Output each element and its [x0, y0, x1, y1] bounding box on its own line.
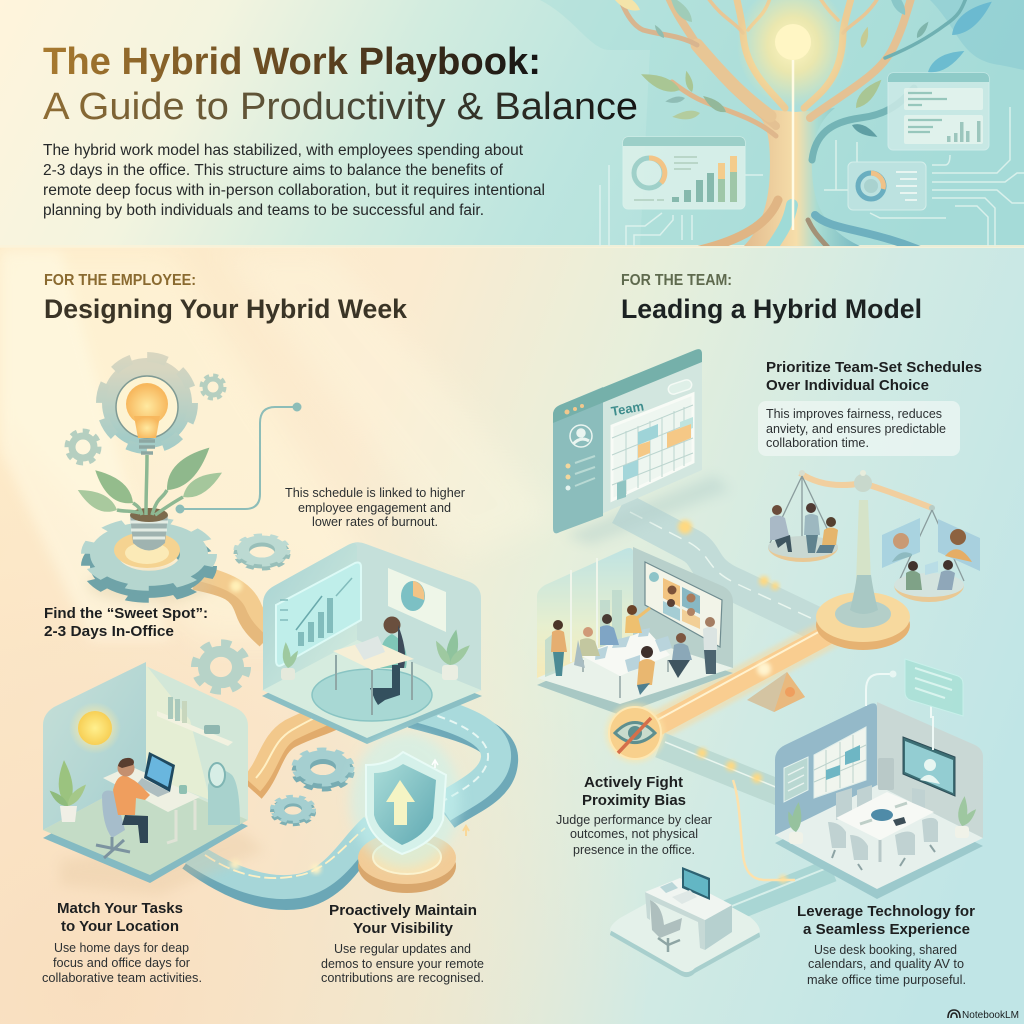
- speaker: [878, 758, 894, 790]
- callout: prioritize team-set schedules: This improves fairness, reduces: [766, 406, 942, 421]
- right pan with people: [882, 510, 980, 602]
- icon: crossed-out eye (proximity bias): [605, 703, 665, 763]
- text: sweet spot heading: 2-3 Days In-Office: [44, 623, 174, 640]
- text: schedule benefit: This schedule is linked to higher: [285, 485, 466, 500]
- icon: triangle marker: [747, 672, 805, 712]
- text: proximity bias: presence in the office.: [573, 842, 695, 857]
- chair: [650, 900, 682, 952]
- text: leverage technology: Leverage Technology for: [797, 903, 975, 920]
- text: schedule benefit: lower rates of burnout.: [312, 514, 438, 529]
- text: sweet spot heading: Find the “Sweet Spot”:: [44, 605, 208, 622]
- conference table: [580, 628, 672, 698]
- seated woman: [816, 517, 838, 553]
- text: maintain visibility: Your Visibility: [353, 920, 454, 937]
- illustration: single desk platform: [610, 867, 760, 977]
- icon: floating tech panel and connectors: [866, 659, 963, 750]
- icon: lightbulb plant on gear: [74, 357, 226, 603]
- text: schedule benefit: [285, 485, 466, 529]
- illustration: office focus room: [262, 542, 482, 744]
- icon: shield with arrow on gold disc: [350, 732, 469, 893]
- illustration: tree with dashboards: [600, 0, 1024, 250]
- profile icon: [570, 425, 592, 447]
- title: [43, 41, 638, 128]
- dashboard: top right list: [888, 73, 989, 150]
- text: match tasks: Use home days for deap: [54, 940, 189, 955]
- text: match tasks: to Your Location: [61, 918, 179, 935]
- large base gear: [88, 521, 212, 603]
- watermark: NotebookLM: NotebookLM: [962, 1009, 1019, 1021]
- plant: [47, 760, 89, 822]
- standing woman: [804, 503, 820, 553]
- background: header band: [0, 0, 1024, 248]
- heading: for the employee: [44, 272, 408, 324]
- dashboard: donut and bars: [623, 137, 745, 209]
- beam: [799, 470, 935, 511]
- icon: small gears: [67, 376, 288, 691]
- text: sweet spot heading: [44, 605, 208, 640]
- text: match tasks: Match Your Tasks: [57, 900, 183, 917]
- text: leverage technology: calendars, and quality AV to: [808, 956, 964, 971]
- desk body: [645, 892, 705, 950]
- person at desk: [370, 616, 407, 705]
- text: maintain visibility: Use regular updates and: [334, 941, 471, 956]
- title: The Hybrid Work Playbook:: [43, 41, 541, 83]
- left pan with people: [768, 476, 838, 562]
- road: glowing beam from scale to eye: [640, 623, 840, 735]
- wall video screen: [645, 562, 722, 647]
- text: proximity bias: Proximity Bias: [582, 792, 686, 809]
- plants: [281, 629, 473, 680]
- illustration: conference room with technology: [775, 702, 983, 899]
- text: maintain visibility: Proactively Maintain: [329, 902, 477, 919]
- illustration: team calendar window: [553, 349, 730, 545]
- road: gold path from bulb to office: [195, 572, 272, 638]
- icon: road gears: [273, 750, 351, 824]
- road: eye to conference room: [660, 742, 780, 793]
- plants: [785, 796, 978, 844]
- text: leverage technology: [797, 903, 975, 987]
- heading: for the team: [621, 272, 922, 324]
- callout: prioritize team-set schedules: Over Individual Choice: [766, 377, 929, 394]
- scale base: [816, 500, 910, 650]
- wall clock arch: [208, 763, 240, 825]
- conference table and chairs: [828, 785, 938, 870]
- window with skyline: [537, 548, 633, 678]
- text: schedule benefit: employee engagement and: [298, 500, 451, 515]
- seated people: [906, 560, 955, 590]
- wall calendar: [814, 727, 866, 798]
- intro paragraph: The hybrid work model has stabilized, with employees spending about: [43, 142, 524, 159]
- text: match tasks: focus and office days for: [53, 955, 191, 970]
- tree trunk and branches: [620, 0, 966, 250]
- monitor and keyboard: [660, 867, 710, 904]
- tree leaves: [606, 0, 996, 140]
- person on chair: [96, 758, 150, 858]
- callout: prioritize team-set schedules: collaboration time.: [766, 435, 869, 450]
- road: blue path from home to shield: [190, 826, 372, 897]
- intro paragraph: 2-3 days in the office. This structure aims to balance the benefits of: [43, 162, 504, 179]
- calendar grid: [612, 394, 693, 500]
- text: maintain visibility: contributions are recognised.: [321, 970, 484, 985]
- heading: for the team: Leading a Hybrid Model: [621, 294, 922, 324]
- team label: Team: [610, 398, 645, 419]
- wall screen with profile: [903, 737, 955, 796]
- text: maintain visibility: demos to ensure your remote: [321, 956, 484, 971]
- callout: prioritize team-set schedules: Prioritize Team-Set Schedules: [766, 359, 982, 376]
- illustration: meeting room: [537, 547, 733, 715]
- wall screen with chart: [276, 562, 361, 666]
- gold disc: [358, 832, 456, 893]
- plant stem and leaves: [74, 440, 226, 518]
- text: proximity bias: outcomes, not physical: [570, 826, 698, 841]
- callout: prioritize team-set schedules: [758, 359, 982, 456]
- heading: for the employee: FOR THE EMPLOYEE:: [44, 272, 196, 289]
- background: lower section: [0, 245, 1024, 1024]
- callout connector line: [176, 404, 300, 512]
- wall shelf with books: [157, 697, 233, 746]
- desk and laptop: [103, 752, 200, 843]
- text: leverage technology: Use desk booking, shared: [814, 942, 957, 957]
- dashboard: small donut: [848, 162, 926, 210]
- wall side panel: [784, 757, 808, 802]
- intro paragraph: remote deep focus with in-person collaboration, but it requires intentional: [43, 182, 545, 199]
- glowing sap line and light: [742, 0, 841, 230]
- screw base of the bulb: [130, 508, 168, 550]
- heading: for the employee: Designing Your Hybrid Week: [44, 294, 408, 324]
- road: desk to conference room: [727, 780, 832, 912]
- text: proximity bias: [556, 774, 713, 857]
- sun on wall: [69, 702, 121, 754]
- sidebar list: [566, 456, 595, 490]
- heading: for the team: FOR THE TEAM:: [621, 272, 732, 289]
- illustration: home office room: [43, 662, 265, 895]
- meeting people: [551, 605, 717, 695]
- road: calendar to scale: [620, 508, 825, 628]
- title: A Guide to Productivity & Balance: [43, 86, 638, 128]
- text: maintain visibility: [321, 902, 484, 985]
- text: proximity bias: Judge performance by clear: [556, 812, 713, 827]
- top gear with bulb: [101, 357, 193, 453]
- callout: prioritize team-set schedules: anviety, and ensures predictable: [766, 421, 946, 436]
- desk: [333, 636, 414, 715]
- video tile left: [882, 518, 920, 568]
- seated man: [770, 505, 792, 552]
- text: leverage technology: a Seamless Experience: [803, 921, 970, 938]
- intro paragraph: [43, 142, 545, 219]
- text: proximity bias: Actively Fight: [584, 774, 683, 791]
- text: match tasks: collaborative team activities.: [42, 970, 202, 985]
- wall poster: [388, 568, 446, 632]
- icon: balance scale: [768, 470, 980, 650]
- video tile right: [938, 519, 980, 571]
- text: leverage technology: make office time purposeful.: [807, 972, 966, 987]
- road: gold path between home and office: [252, 711, 335, 790]
- circuit lines: [600, 107, 1024, 247]
- intro paragraph: planning by both individuals and teams to be successful and fair.: [43, 202, 484, 219]
- road: blue path behind shield: [412, 706, 502, 815]
- text: match tasks: [42, 900, 202, 985]
